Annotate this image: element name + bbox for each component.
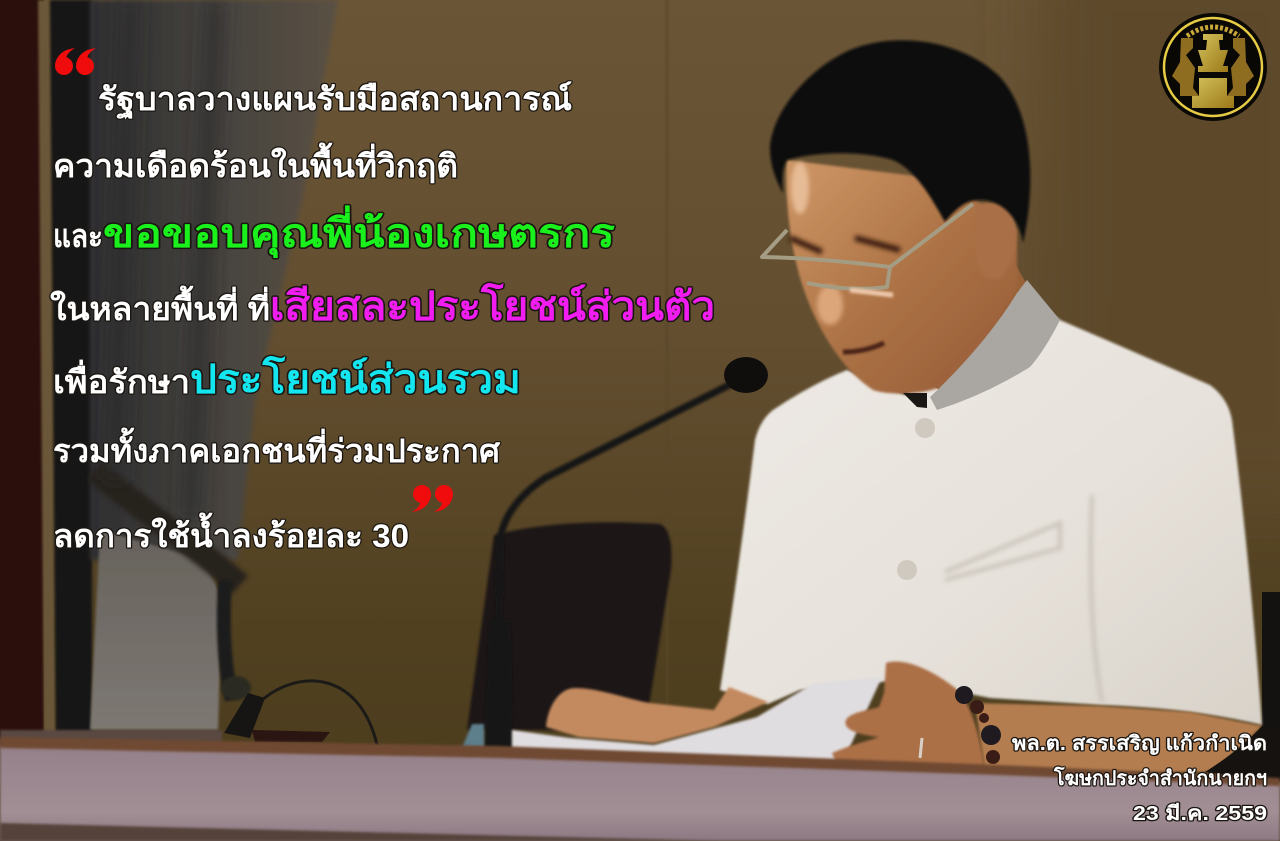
base bbox=[1192, 78, 1234, 108]
right lion bbox=[1227, 38, 1254, 96]
left lion bbox=[1172, 38, 1199, 96]
papers bbox=[512, 677, 882, 762]
collar bbox=[930, 280, 1060, 410]
table bbox=[0, 737, 1280, 841]
shirt folds bbox=[945, 495, 1102, 702]
neck bbox=[900, 255, 1030, 400]
left dark pillar and curtain bbox=[0, 0, 338, 740]
position: โฆษกประจำสำนักนายกฯ bbox=[1053, 766, 1267, 790]
forehead highlight bbox=[791, 162, 809, 214]
quote text block bbox=[50, 48, 715, 554]
collar gap bbox=[903, 393, 927, 408]
chair bbox=[467, 522, 672, 730]
line 7: ลดการใช้น้ำลงร้อยละ 30 bbox=[53, 512, 409, 554]
microphone bbox=[462, 357, 768, 749]
table objects and cable bbox=[0, 681, 377, 745]
face bbox=[786, 160, 1017, 394]
buttons bbox=[915, 418, 935, 438]
nose highlight bbox=[817, 285, 843, 325]
chair at right edge bbox=[1262, 592, 1280, 727]
line 6: รวมทั้งภาคเอกชนที่ร่วมประกาศ bbox=[53, 427, 501, 469]
line 3 bbox=[53, 205, 616, 259]
line 3: ขอขอบคุณพี่น้องเกษตรกร bbox=[103, 205, 616, 259]
line 1: รัฐบาลวางแผนรับมือสถานการณ์ bbox=[98, 81, 572, 120]
right forearm bbox=[975, 703, 1262, 772]
ear bbox=[974, 202, 1016, 279]
line 4 bbox=[50, 283, 715, 329]
dark behind forearm bbox=[1205, 726, 1280, 782]
left hand and arm bbox=[546, 687, 768, 743]
centre bowl bbox=[1198, 34, 1228, 72]
glasses bbox=[762, 204, 973, 289]
line 3: และ bbox=[53, 218, 103, 254]
closing quote mark bbox=[412, 485, 453, 512]
glasses highlight bbox=[850, 290, 893, 295]
line 4: ในหลายพื้นที่ ที่ bbox=[50, 285, 270, 327]
mouth bbox=[843, 343, 884, 352]
bracelet beads bbox=[955, 686, 1001, 764]
line 5: เพื่อรักษา bbox=[53, 359, 190, 400]
line 2: ความเดือดร้อนในพื้นที่วิกฤติ bbox=[53, 142, 458, 184]
ring bbox=[920, 738, 922, 758]
line 5: ประโยชน์ส่วนรวม bbox=[190, 356, 521, 402]
shirt bbox=[720, 300, 1262, 725]
hair bbox=[770, 40, 1030, 243]
date: 23 มี.ค. 2559 bbox=[1133, 802, 1267, 825]
eyes and brows bbox=[790, 238, 900, 252]
speaker bbox=[512, 40, 1280, 782]
government seal bbox=[1159, 13, 1267, 121]
line 4: เสียสละประโยชน์ส่วนตัว bbox=[270, 283, 715, 329]
top ornament bbox=[1187, 27, 1239, 36]
name: พล.ต. สรรเสริญ แก้วกำเนิด bbox=[1012, 732, 1267, 755]
opening quote mark bbox=[55, 48, 96, 75]
speaker credit bbox=[1012, 732, 1267, 825]
line 5 bbox=[53, 356, 521, 402]
right hand bbox=[832, 661, 985, 770]
